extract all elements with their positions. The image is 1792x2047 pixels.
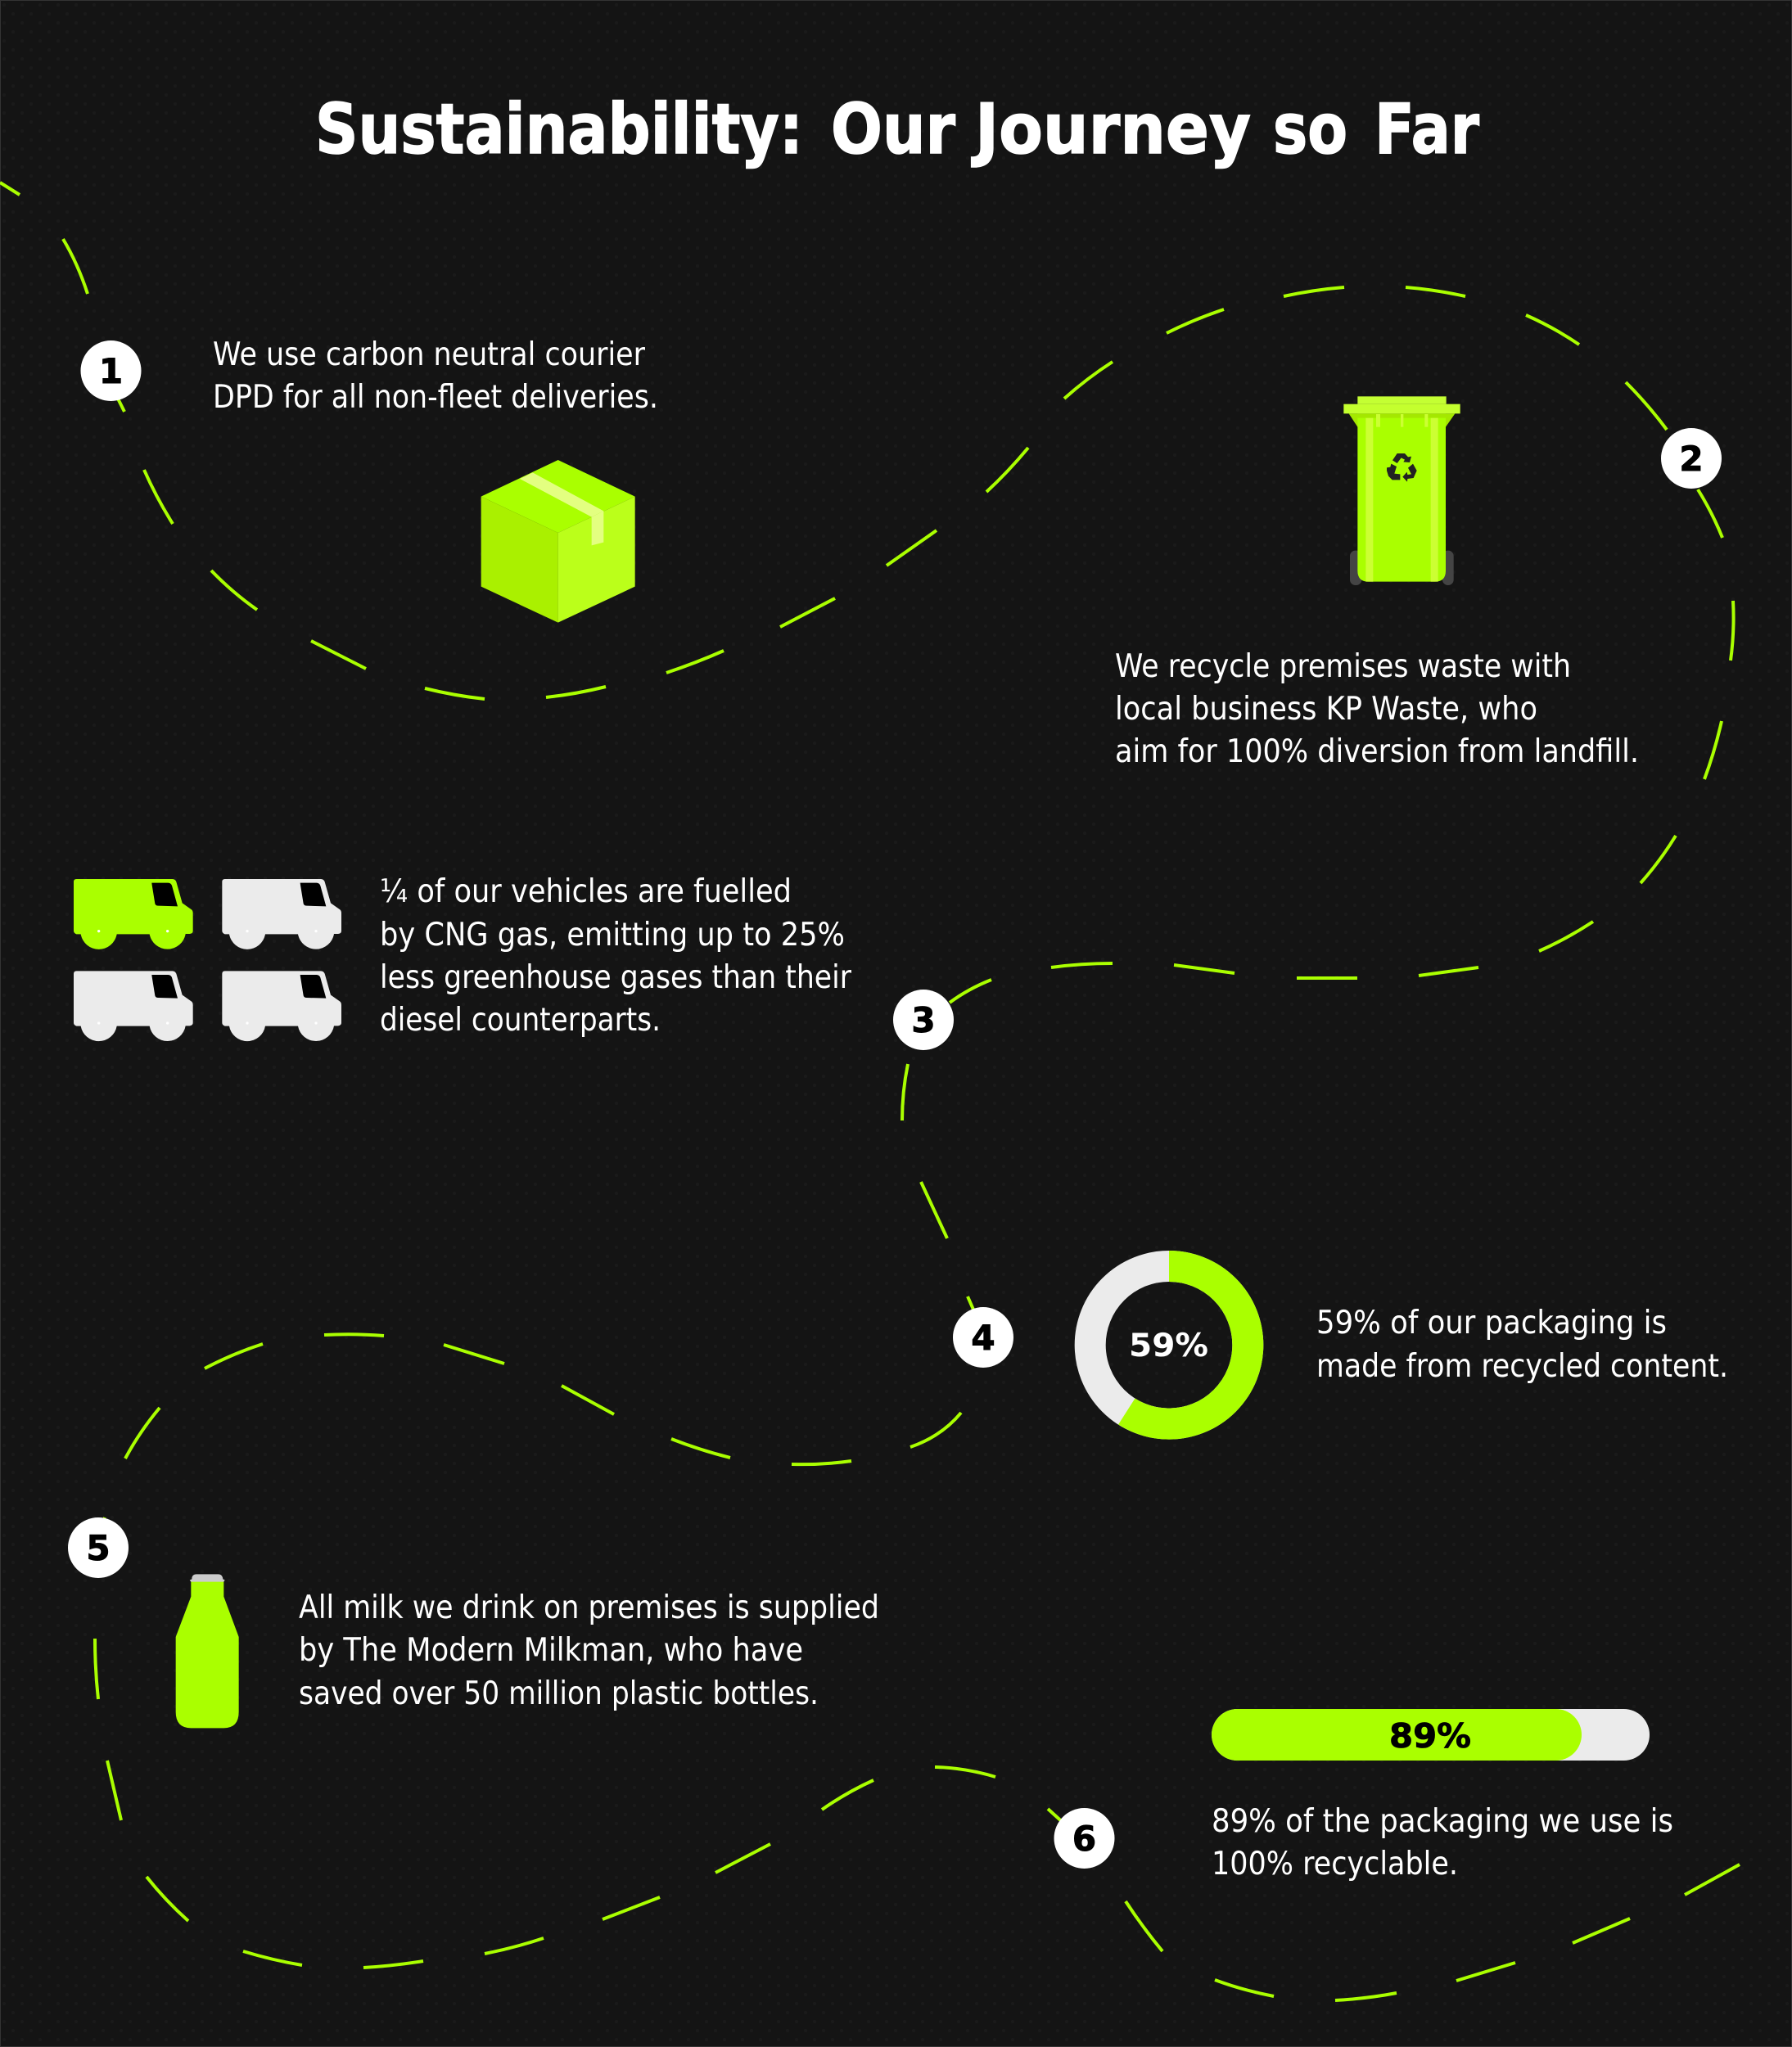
step 2 marker (1661, 428, 1722, 489)
step 2 text: aim for 100% diversion from landfill. (1115, 733, 1639, 770)
milk text: by The Modern Milkman, who have (299, 1632, 803, 1669)
vehicles text (380, 873, 852, 1039)
packaging recycled text (1316, 1305, 1728, 1385)
step 1 marker: 1 (99, 351, 123, 391)
vehicles text: by CNG gas, emitting up to 25% (380, 917, 845, 954)
step 3 marker (893, 990, 954, 1050)
title: Sustainability: (315, 89, 803, 170)
step 5 marker (68, 1517, 129, 1578)
van: grey bottom left (74, 971, 193, 1041)
step 1 text (213, 336, 658, 416)
step 2 text: We recycle premises waste with (1115, 648, 1571, 685)
vehicles text: diesel counterparts. (380, 1002, 661, 1039)
van: grey bottom right (222, 971, 341, 1041)
step 2 marker: 2 (1679, 439, 1704, 479)
step 1 text: DPD for all non-fleet deliveries. (213, 379, 658, 416)
step 3 marker: 3 (911, 1000, 936, 1040)
title: Far (1374, 89, 1479, 170)
milk text (299, 1589, 879, 1712)
title: Journey (971, 89, 1251, 170)
step 1 text: We use carbon neutral courier (213, 336, 646, 373)
packaging recycled text: 59% of our packaging is (1316, 1305, 1667, 1341)
icon: four delivery vans (74, 879, 341, 1041)
vehicles text: ¼ of our vehicles are fuelled (380, 873, 792, 910)
vehicles text: less greenhouse gases than their (380, 959, 852, 996)
packaging recycled text: made from recycled content. (1316, 1348, 1728, 1385)
title (315, 89, 1479, 170)
step 2 text (1115, 648, 1639, 770)
progress bar: 89% (1212, 1709, 1650, 1761)
step 4 marker (953, 1307, 1013, 1368)
van: grey top right (222, 879, 341, 949)
icon: milk bottle (176, 1574, 239, 1728)
recyclable packaging text: 89% of the packaging we use is (1212, 1803, 1673, 1840)
van: green (74, 879, 193, 949)
milk text: All milk we drink on premises is supplied (299, 1589, 879, 1626)
step 6 marker (1054, 1808, 1115, 1869)
recyclable packaging text (1212, 1803, 1673, 1882)
donut chart: 59%: 59% (1129, 1328, 1208, 1364)
step 4 marker: 4 (971, 1318, 995, 1358)
icon: recycling wheelie bin (1343, 396, 1460, 585)
progress bar: 89%: 89% (1389, 1716, 1471, 1756)
step 1 marker (80, 340, 141, 401)
icon: parcel box (481, 460, 635, 623)
milk text: saved over 50 million plastic bottles. (299, 1675, 819, 1712)
title: so (1273, 89, 1347, 170)
recyclable packaging text: 100% recyclable. (1212, 1846, 1458, 1882)
donut chart: 59% (1090, 1266, 1248, 1424)
step 5 marker: 5 (86, 1528, 111, 1568)
step 2 text: local business KP Waste, who (1115, 691, 1537, 728)
title: Our (831, 89, 955, 170)
step 6 marker: 6 (1072, 1819, 1096, 1859)
